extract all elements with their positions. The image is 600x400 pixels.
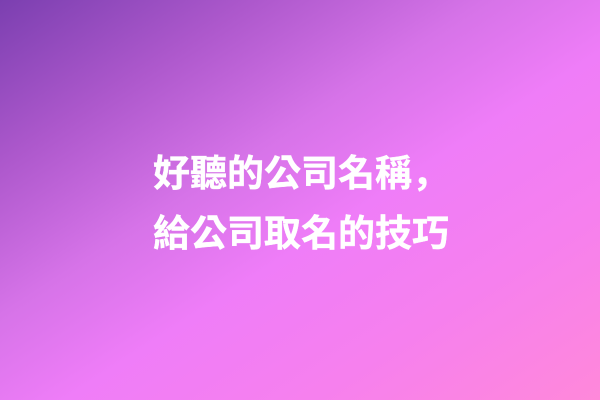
title line 1: 好聽的公司名稱， bbox=[153, 153, 449, 194]
title bbox=[153, 153, 449, 254]
title line 2: 給公司取名的技巧 bbox=[153, 213, 449, 254]
